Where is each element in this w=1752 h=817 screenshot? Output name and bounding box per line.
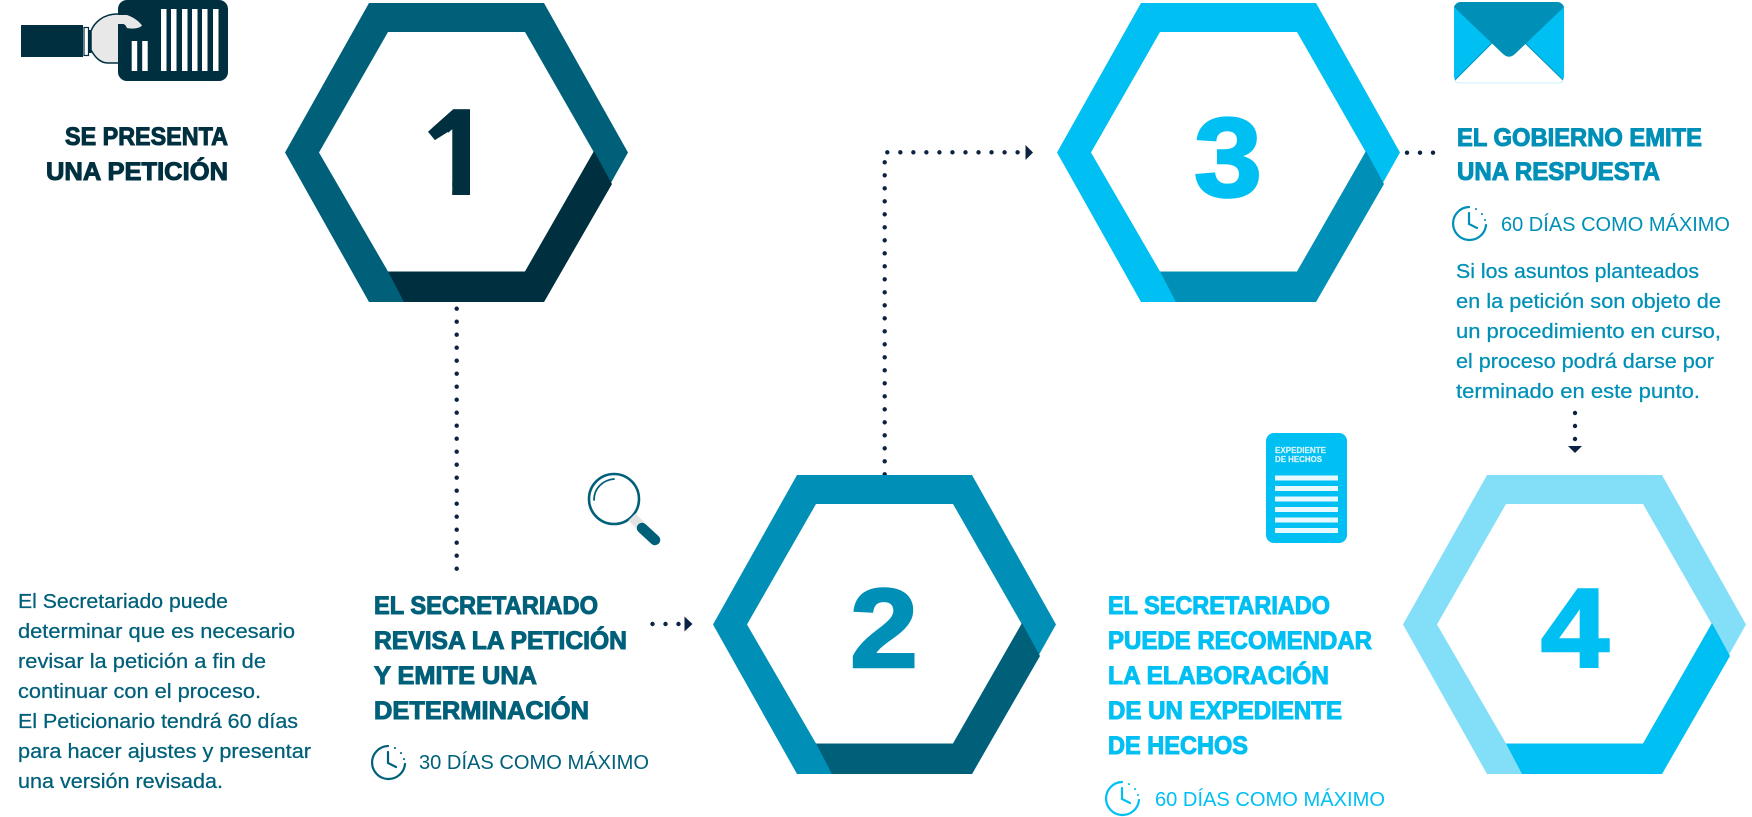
heading: step 3 (1457, 124, 1702, 186)
deadline: step 4: 60 DÍAS COMO MÁXIMO (1155, 788, 1385, 811)
text block: termination note (1456, 261, 1721, 403)
heading: step 4: EL SECRETARIADO (1108, 592, 1330, 620)
heading: step 3: UNA RESPUESTA (1457, 158, 1660, 186)
icon: document: DE HECHOS (1275, 455, 1323, 464)
hexagon 3 (1057, 3, 1400, 302)
heading: step 2: Y EMITE UNA (374, 662, 537, 690)
text block: revision note: determinar que es necesario (18, 621, 295, 643)
icon: clock (372, 746, 405, 779)
number 1: 1 (424, 84, 492, 222)
heading: step 3: EL GOBIERNO EMITE (1457, 124, 1702, 152)
text block: termination note: Si los asuntos planteados (1456, 261, 1699, 283)
icon: document: EXPEDIENTE (1275, 446, 1327, 455)
icon: magnifying glass (589, 474, 655, 540)
text block: revision note: El Peticionario tendrá 60 días (18, 711, 298, 733)
deadline: step 2 (372, 746, 649, 779)
deadline: step 4 (1106, 782, 1385, 815)
deadline: step 3 (1453, 207, 1730, 240)
arrow: step 2 text to hexagon 2 (650, 616, 692, 632)
text block: termination note: el proceso podrá darse por (1456, 351, 1714, 373)
text block: revision note: una versión revisada. (18, 771, 223, 793)
heading: step 4: PUEDE RECOMENDAR (1108, 627, 1372, 655)
hexagon 4 (1403, 475, 1746, 774)
icon: clock (1453, 207, 1486, 240)
arrow: hexagon 2 to hexagon 3 (885, 145, 1033, 475)
heading: step 2: REVISA LA PETICIÓN (374, 625, 627, 655)
heading: step 4 (1108, 592, 1372, 760)
heading: step 2: EL SECRETARIADO (374, 592, 598, 620)
text block: revision note: El Secretariado puede (18, 591, 228, 613)
number 4: 4 (1541, 566, 1609, 691)
connector: hexagon 1 to step 2 text (455, 309, 459, 570)
text block: revision note: para hacer ajustes y presentar (18, 741, 311, 763)
text block: termination note: un procedimiento en curso, (1456, 321, 1721, 343)
heading: step 1: UNA PETICIÓN (46, 156, 228, 186)
heading: step 1 (46, 123, 228, 186)
text block: revision note: continuar con el proceso. (18, 681, 261, 703)
text block: revision note (18, 591, 311, 793)
number 3: 3 (1194, 95, 1262, 220)
text block: termination note: en la petición son objeto de (1456, 291, 1721, 313)
heading: step 2: DETERMINACIÓN (374, 695, 589, 725)
deadline: step 2: 30 DÍAS COMO MÁXIMO (419, 751, 649, 774)
text block: revision note: revisar la petición a fin de (18, 651, 266, 673)
heading: step 2 (374, 592, 627, 725)
heading: step 1: SE PRESENTA (65, 123, 228, 151)
arrow: step 3 text to hexagon 4 (1568, 411, 1582, 453)
heading: step 4: DE UN EXPEDIENTE (1108, 697, 1342, 725)
deadline: step 3: 60 DÍAS COMO MÁXIMO (1501, 213, 1730, 236)
heading: step 4: DE HECHOS (1108, 732, 1248, 760)
heading: step 4: LA ELABORACIÓN (1108, 660, 1329, 690)
hexagon 2 (713, 475, 1056, 774)
icon: envelope (1454, 2, 1564, 83)
icon: document (1266, 433, 1347, 543)
connector: hexagon 3 to step 3 text (1405, 150, 1435, 155)
icon: clock (1106, 782, 1139, 815)
text block: termination note: terminado en este punto. (1456, 381, 1700, 403)
icon: hand holding document (21, 0, 228, 81)
number 2: 2 (850, 566, 918, 691)
hexagon 1 (285, 3, 628, 302)
